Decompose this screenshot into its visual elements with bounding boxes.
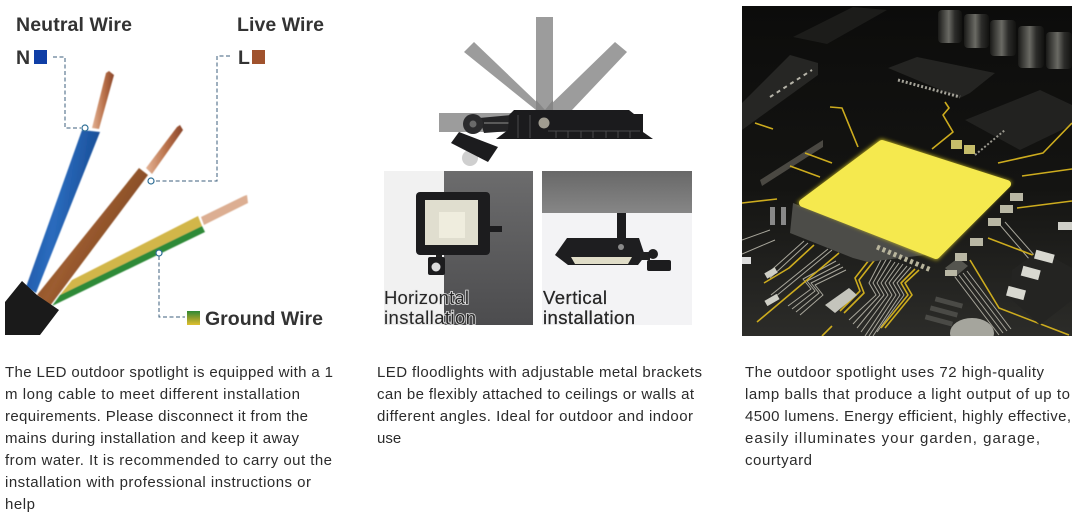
photo: horizontal installation (384, 171, 533, 328)
icon: brown wire (37, 125, 183, 306)
text block: bracket description: different angles. Ideal for outdoor and indoor (377, 408, 693, 425)
icon: grey rotation arms (439, 17, 627, 132)
connector: live (148, 56, 230, 184)
heading: live wire: Live Wire (237, 14, 324, 36)
icon: yellow-green wire (52, 195, 248, 306)
text block: cable description: installation with professional instructions or (5, 474, 311, 491)
icon: yellow LED chip (803, 144, 1007, 255)
text block: cable description: help (5, 496, 35, 513)
text block: bracket description (377, 364, 702, 447)
text block: cable description: requirements. Please disconnect it from the (5, 408, 308, 425)
text block: bracket description: can be flexibly attached to ceilings or walls at (377, 386, 695, 403)
caption: vertical installation: installation (543, 307, 635, 328)
icon: surface components (742, 140, 1072, 348)
text block: cable description: The LED outdoor spotlight is equipped with a 1 (5, 364, 333, 381)
caption: vertical installation: Vertical (543, 287, 607, 308)
text block: cable description: mains during installation and keep it away (5, 430, 300, 447)
text block: lumen description: lamp balls that produce a light output of up to (745, 386, 1070, 403)
panel: glowing LED chip on circuit board (742, 6, 1072, 348)
heading: neutral wire: Neutral Wire (16, 14, 132, 36)
label: N with blue swatch: N (16, 47, 30, 69)
text block: bracket description: use (377, 430, 401, 447)
icon: capacitors (938, 10, 1072, 69)
text block: lumen description (745, 364, 1071, 469)
label: L with brown swatch (238, 47, 265, 69)
text block: lumen description: courtyard (745, 452, 812, 469)
photo: vertical installation (542, 171, 692, 328)
board wiring (742, 222, 1035, 336)
text block: lumen description: easily illuminates your garden, garage, (745, 430, 1040, 447)
text block: bracket description: LED floodlights with adjustable metal brackets (377, 364, 702, 381)
label: ground wire with swatch: Ground Wire (205, 308, 323, 330)
connector: neutral (53, 57, 88, 131)
label: N with blue swatch (16, 47, 47, 69)
text block: lumen description: 4500 lumens. Energy efficient, highly effective, (745, 408, 1071, 425)
connector: ground (156, 250, 185, 317)
icon: glow behind chip (797, 139, 1012, 260)
caption: horizontal installation: installation (384, 307, 476, 328)
text block: cable description: m long cable to meet different installation (5, 386, 300, 403)
panel: wire diagram (5, 14, 324, 335)
icon: integrated circuits (742, 7, 1072, 186)
icon: floodlight side view (451, 110, 653, 166)
caption: horizontal installation: Horizontal (384, 287, 469, 308)
icon: blue wire (26, 71, 114, 293)
text block: lumen description: The outdoor spotlight uses 72 high-quality (745, 364, 1044, 381)
icon: black cable sheath (5, 281, 59, 335)
label: L with brown swatch: L (238, 47, 250, 69)
panel: adjustable bracket (384, 17, 692, 328)
icon: chip base (790, 203, 925, 262)
text block: cable description (5, 364, 333, 513)
text block: cable description: from water. It is recommended to carry out the (5, 452, 332, 469)
yellow circuit traces (742, 102, 1072, 336)
